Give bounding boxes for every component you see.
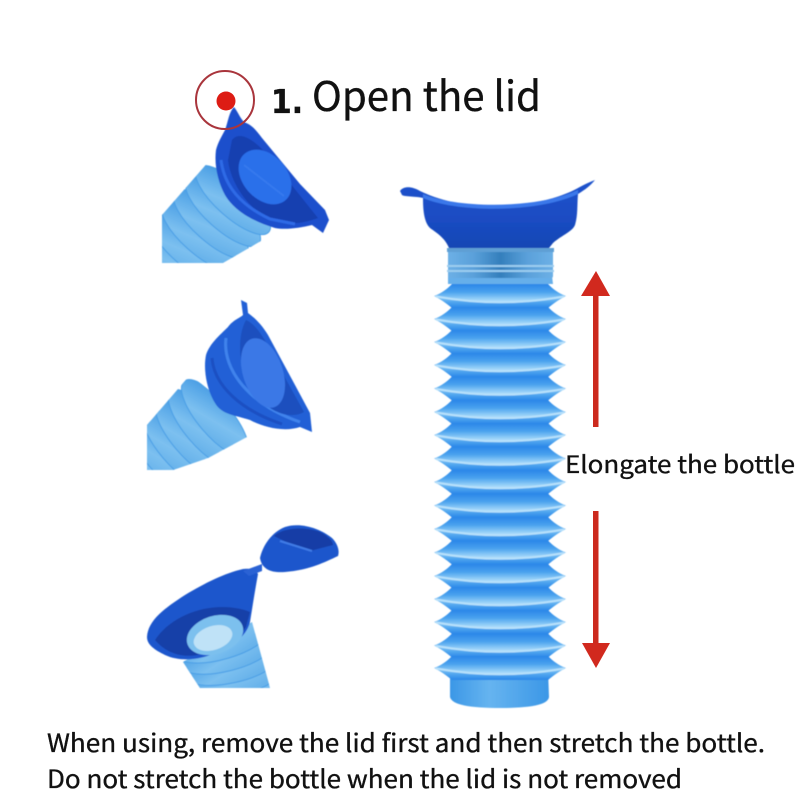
main bottle: cap end (450, 670, 549, 708)
arrow: up, red (581, 271, 610, 427)
instruction text: When using, remove the lid first and then stretch the bottle. (47, 724, 765, 760)
marker: red circle and dot on the lid tab (196, 71, 254, 129)
bellows of half-open bottle (146, 378, 248, 471)
label: Elongate the bottle: Elongate the bottle (565, 445, 795, 480)
step heading: 1. Open the lid: 1. (271, 82, 303, 121)
step heading: 1. Open the lid: Open the lid (312, 63, 541, 123)
instruction text (47, 724, 765, 796)
main bottle: threaded neck (447, 248, 554, 284)
instruction text: Do not stretch the bottle when the lid is not removed (47, 760, 682, 796)
photo: closed lid, tab marked (161, 106, 330, 264)
main bottle: ridges (434, 284, 566, 680)
bellows of closed bottle (161, 164, 272, 264)
bellows of open bottle (182, 622, 270, 689)
photo: lid open with hinge (146, 524, 340, 689)
arrow: down, red (582, 511, 610, 668)
main bottle: extended bellows (400, 180, 595, 708)
photo: lid seen from the side (146, 300, 313, 471)
main bottle: blue funnel (400, 180, 595, 248)
